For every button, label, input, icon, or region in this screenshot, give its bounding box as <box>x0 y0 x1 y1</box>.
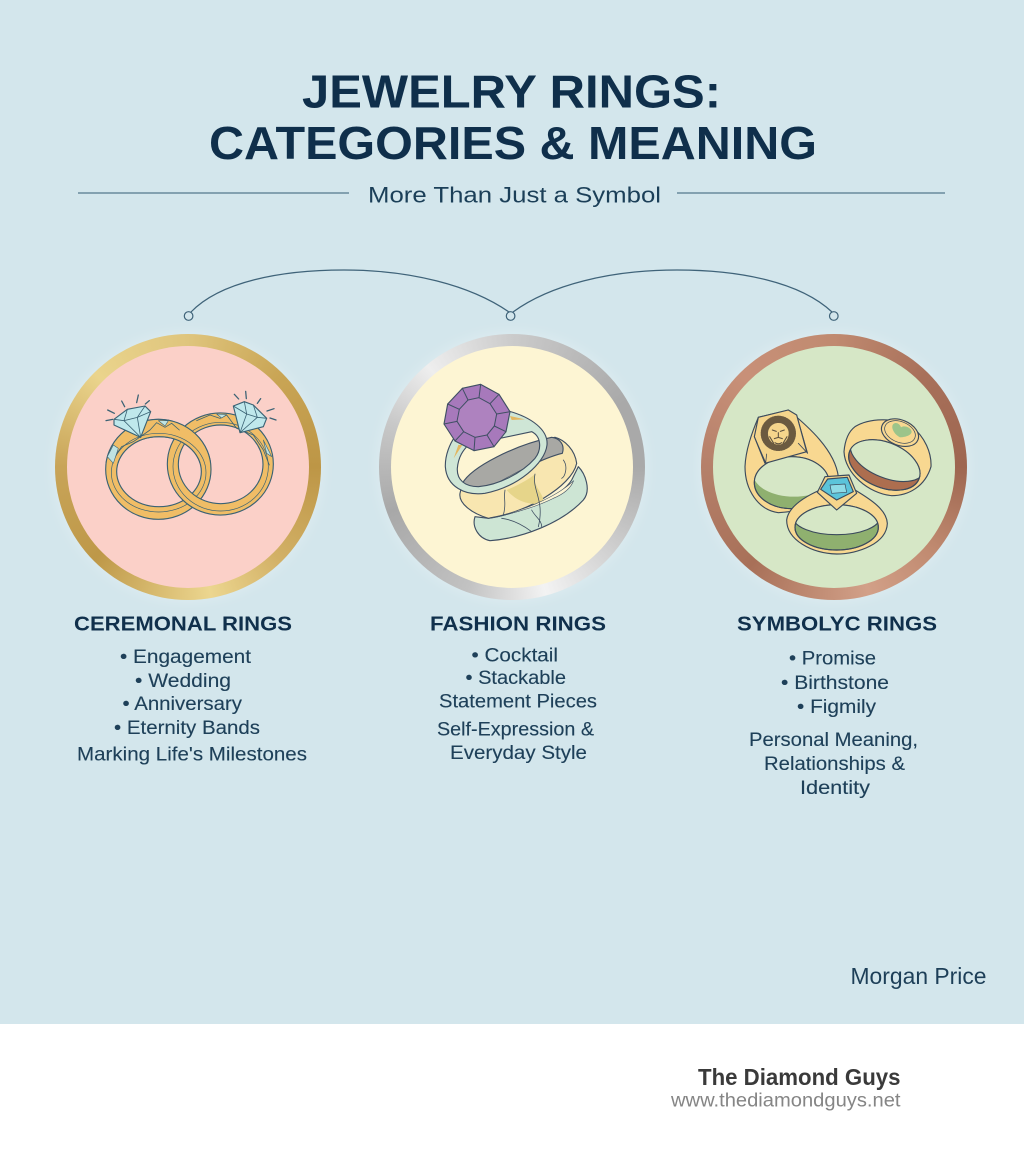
list: ceremonal types: • Eternity Bands <box>114 718 260 739</box>
symbolyc text <box>737 612 937 799</box>
copper circle <box>701 334 967 600</box>
list: ceremonal types: • Anniversary <box>122 694 243 715</box>
list: ceremonal types: Marking Life's Milestones <box>77 744 307 766</box>
heading: symbolyc rings: SYMBOLYC RINGS <box>737 612 937 636</box>
list: fashion types: Statement Pieces <box>439 692 597 712</box>
subtitle with rules: More Than Just a Symbol <box>368 182 661 208</box>
list: fashion types: Everyday Style <box>450 743 587 764</box>
list: fashion types: • Cocktail <box>472 646 558 666</box>
icon: stacked fashion rings <box>443 384 588 542</box>
icon: interlocked diamond rings <box>105 390 277 520</box>
gold circle <box>55 334 321 600</box>
list: fashion types <box>437 646 597 764</box>
list: symbolyc types: • Promise <box>789 648 876 670</box>
title: JEWELRY RINGS: <box>302 66 721 118</box>
title: CATEGORIES & MEANING <box>209 117 817 169</box>
list: symbolyc types: • Figmily <box>797 697 877 718</box>
list: symbolyc types: Relationships & <box>764 754 905 775</box>
list: ceremonal types: • Wedding <box>135 671 231 692</box>
list: ceremonal types: • Engagement <box>120 647 252 668</box>
footer brand: www.thediamondguys.net <box>670 1090 901 1112</box>
ceremonal text <box>74 612 307 766</box>
footer brand <box>670 1064 901 1112</box>
panel: ceremonal rings <box>55 334 321 766</box>
list: symbolyc types: • Birthstone <box>781 673 889 694</box>
icon: signet, heart and gemstone rings <box>744 409 932 555</box>
list: fashion types: Self-Expression & <box>437 720 594 740</box>
author name: Morgan Price <box>850 963 986 989</box>
connector arcs <box>184 269 839 321</box>
footer brand: The Diamond Guys <box>698 1064 900 1090</box>
silver circle <box>379 334 645 600</box>
panel: fashion rings <box>379 334 645 764</box>
list: fashion types: • Stackable <box>466 668 566 689</box>
list: symbolyc types <box>749 648 918 799</box>
fashion text <box>430 612 606 764</box>
list: ceremonal types <box>77 647 307 766</box>
title <box>209 66 817 169</box>
heading: ceremonal rings: CEREMONAL RINGS <box>74 612 292 636</box>
list: symbolyc types: Personal Meaning, <box>749 730 918 751</box>
panel: symbolyc rings <box>701 334 967 799</box>
list: symbolyc types: Identity <box>800 778 871 799</box>
heading: fashion rings: FASHION RINGS <box>430 612 606 636</box>
